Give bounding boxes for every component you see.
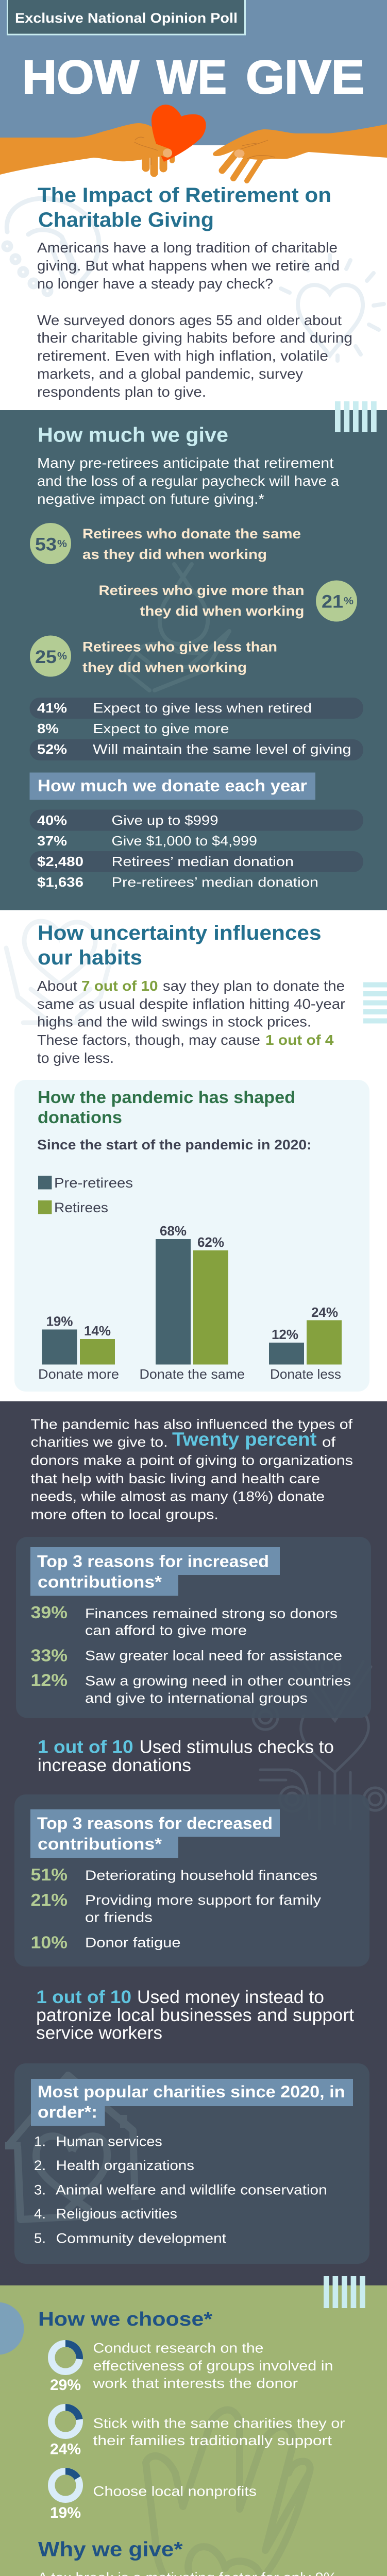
bar chart: 24% bbox=[311, 1304, 338, 1320]
ranked list: 4. bbox=[34, 2206, 46, 2222]
table: annual donations: Give $1,000 to $4,999 bbox=[111, 833, 257, 849]
reason list: 39% bbox=[31, 1603, 68, 1622]
donut: 24% same charities: their families traditionally support bbox=[93, 2433, 332, 2448]
heading: our habits bbox=[38, 946, 142, 969]
table: expectations: Will maintain the same level of giving bbox=[93, 741, 351, 757]
title bbox=[22, 51, 364, 104]
stat: 21%: they did when working bbox=[140, 603, 304, 619]
bar chart: 62% bbox=[197, 1234, 224, 1250]
subheading: how much we donate each year: How much we donate each year bbox=[38, 776, 307, 795]
body text: more often to local groups. bbox=[31, 1506, 218, 1522]
body text: that help with basic living and health care bbox=[31, 1471, 320, 1486]
decorative circle bbox=[0, 2302, 24, 2354]
intro text: their charitable giving habits before and during bbox=[37, 330, 352, 346]
donut: 29% research: effectiveness of groups involved in bbox=[93, 2358, 333, 2374]
header section bbox=[0, 0, 387, 181]
stat: local businesses: service workers bbox=[36, 2023, 162, 2043]
heading: How much we give bbox=[38, 423, 228, 446]
watermark: money bag and hand bbox=[124, 564, 229, 690]
ranked list: Human services bbox=[56, 2134, 162, 2149]
reason list: Donor fatigue bbox=[85, 1935, 180, 1951]
body text bbox=[31, 1417, 353, 1522]
panel: most popular charities bbox=[5, 2063, 369, 2264]
heading: How uncertainty influences bbox=[38, 922, 322, 944]
watermark: hands pattern bbox=[253, 1655, 386, 1829]
heading bbox=[38, 184, 331, 231]
panel: reasons for increased contributions bbox=[16, 1537, 371, 1718]
table: expectations: Expect to give more bbox=[93, 721, 229, 736]
reason list: and give to international groups bbox=[85, 1690, 308, 1706]
stat: local businesses: Used money instead to bbox=[137, 1987, 324, 2007]
chart subtitle: Since the start of the pandemic in 2020: bbox=[37, 1137, 311, 1153]
stat: 25% bbox=[30, 636, 277, 677]
body text: same as usual despite inflation hitting 40-year bbox=[37, 996, 345, 1012]
stat: local businesses: patronize local businesses and support bbox=[36, 2005, 354, 2025]
heading: Charitable Giving bbox=[38, 209, 214, 231]
table: annual donations: Give up to $999 bbox=[111, 812, 218, 828]
stat: local businesses bbox=[36, 1987, 354, 2043]
table: annual donations: 37% bbox=[37, 833, 67, 849]
panel heading bbox=[38, 1088, 295, 1127]
intro text: no longer have a steady pay check? bbox=[37, 276, 273, 292]
stat: stimulus checks bbox=[38, 1737, 334, 1775]
panel heading bbox=[31, 2079, 353, 2126]
stat: 53%: Retirees who donate the same bbox=[82, 526, 301, 541]
watermark: heart with rays bbox=[281, 255, 384, 361]
title: HOW bbox=[22, 51, 139, 104]
reason list: 33% bbox=[31, 1646, 68, 1665]
panel heading: contributions* bbox=[38, 1573, 162, 1591]
table: annual donations: 40% bbox=[37, 812, 67, 828]
stat: 53% bbox=[30, 523, 301, 564]
body text: These factors, though, may cause bbox=[37, 1032, 260, 1048]
stat: 25%: % bbox=[57, 651, 67, 662]
intro text bbox=[37, 240, 352, 400]
reason list: Providing more support for family bbox=[85, 1892, 322, 1908]
body text: charities we give to. bbox=[31, 1434, 168, 1450]
stat: 53%: 53 bbox=[35, 535, 57, 554]
reason list bbox=[31, 1865, 322, 1952]
bar chart: 19% bbox=[46, 1314, 73, 1329]
intro text: We surveyed donors ages 55 and older about bbox=[37, 312, 342, 328]
intro text: giving. But what happens when we retire and bbox=[37, 258, 340, 274]
section: types of charities bbox=[0, 1401, 387, 2285]
body text: 1 out of 4 bbox=[265, 1032, 334, 1048]
panel heading: donations bbox=[38, 1108, 122, 1127]
body text: to give less. bbox=[37, 1050, 114, 1066]
table: annual donations: $1,636 bbox=[37, 874, 83, 890]
ranked list: 2. bbox=[34, 2158, 46, 2173]
reason list: Saw a growing need in other countries bbox=[85, 1673, 351, 1688]
ranked list: 5. bbox=[34, 2231, 46, 2246]
table: expectations: 8% bbox=[37, 721, 59, 736]
ranked list: 1. bbox=[34, 2134, 46, 2149]
donut: 29% research: 29% bbox=[50, 2377, 81, 2394]
table: annual donations: $2,480 bbox=[37, 854, 83, 869]
stat: 25%: Retirees who give less than bbox=[82, 639, 277, 654]
section: how much we give bbox=[0, 401, 387, 910]
panel: reasons for decreased contributions bbox=[14, 1794, 369, 1967]
stat: stimulus checks: Used stimulus checks to bbox=[140, 1737, 334, 1757]
bar chart: Donate the same bbox=[139, 1366, 245, 1382]
table: expectations: Expect to give less when retired bbox=[93, 700, 312, 716]
intro text: markets, and a global pandemic, survey bbox=[37, 366, 303, 382]
intro text bbox=[37, 455, 339, 507]
ranked list: Religious activities bbox=[56, 2206, 177, 2222]
reason list: 12% bbox=[31, 1671, 68, 1690]
table: annual donations: Retirees’ median donation bbox=[111, 854, 294, 869]
stat: 53%: % bbox=[57, 538, 67, 550]
badge: exclusive national opinion poll bbox=[7, 0, 245, 35]
decorative bars bbox=[363, 982, 387, 1023]
bar chart: 12% bbox=[272, 1327, 298, 1342]
reason list: 51% bbox=[31, 1865, 68, 1884]
intro text: Americans have a long tradition of charitable bbox=[37, 240, 338, 256]
badge: exclusive national opinion poll: Exclusive National Opinion Poll bbox=[15, 10, 238, 26]
body text: About bbox=[37, 978, 77, 994]
panel heading: Most popular charities since 2020, in bbox=[38, 2082, 345, 2101]
illustration: hands giving a heart bbox=[0, 105, 387, 181]
table: annual donations: Pre-retirees’ median donation bbox=[111, 874, 318, 890]
donut: 19% local nonprofits: Choose local nonprofits bbox=[93, 2483, 257, 2499]
stat: stimulus checks: 1 out of 10 bbox=[38, 1737, 133, 1757]
body text: donors make a point of giving to organizations bbox=[31, 1453, 353, 1468]
panel heading bbox=[30, 1809, 280, 1858]
intro text: Many pre-retirees anticipate that retirement bbox=[37, 455, 334, 471]
panel heading: How the pandemic has shaped bbox=[38, 1088, 295, 1107]
ranked list: Animal welfare and wildlife conservation bbox=[56, 2182, 327, 2198]
intro text: negative impact on future giving.* bbox=[37, 491, 264, 507]
ranked list bbox=[34, 2134, 327, 2246]
body text: highs and the wild swings in stock prices. bbox=[37, 1014, 311, 1030]
watermark: house with heart bbox=[5, 2075, 139, 2219]
section: how we choose and why we give bbox=[0, 2276, 387, 2576]
decorative bars bbox=[324, 2276, 365, 2308]
body text: 7 out of 10 bbox=[81, 978, 158, 994]
reason list bbox=[31, 1603, 351, 1706]
table: annual donations bbox=[30, 810, 363, 890]
legend bbox=[38, 1175, 133, 1215]
stat: stimulus checks: increase donations bbox=[38, 1755, 191, 1775]
reason list: 10% bbox=[31, 1933, 68, 1952]
legend: Pre-retirees bbox=[54, 1175, 133, 1191]
heading: why we give: Why we give* bbox=[38, 2538, 183, 2561]
donut: 24% same charities bbox=[50, 2408, 345, 2458]
ranked list: 3. bbox=[34, 2182, 46, 2198]
bar chart: Donate more bbox=[38, 1366, 119, 1382]
donut: 29% research bbox=[50, 2340, 333, 2394]
stat: local businesses: 1 out of 10 bbox=[36, 1987, 131, 2007]
heading bbox=[38, 922, 322, 969]
table: expectations: 52% bbox=[37, 741, 67, 757]
panel heading: order*: bbox=[38, 2103, 97, 2122]
stat: 21%: Retirees who give more than bbox=[99, 583, 304, 598]
reason list: Deteriorating household finances bbox=[85, 1868, 317, 1883]
body text: say they plan to donate the bbox=[163, 978, 345, 994]
bar chart bbox=[38, 1223, 342, 1382]
reason list: or friends bbox=[85, 1910, 153, 1925]
decorative bars bbox=[335, 401, 377, 432]
body text bbox=[37, 978, 345, 1066]
bar chart: 14% bbox=[84, 1323, 111, 1338]
body text: of bbox=[322, 1434, 336, 1450]
stat: 25%: they did when working bbox=[82, 659, 247, 675]
watermark: hands with heart bbox=[6, 921, 114, 1023]
intro text: and the loss of a regular paycheck will have a bbox=[37, 473, 339, 489]
intro text: retirement. Even with high inflation, volatile bbox=[37, 348, 328, 364]
intro text: respondents plan to give. bbox=[37, 384, 206, 400]
stat: 21%: % bbox=[344, 596, 354, 607]
heading: how we choose: How we choose* bbox=[38, 2309, 212, 2330]
panel: pandemic chart bbox=[14, 1080, 369, 1392]
panel heading bbox=[30, 1547, 280, 1596]
donut: 24% same charities: 24% bbox=[50, 2441, 81, 2458]
stat: 21% bbox=[99, 580, 357, 621]
reason list: Finances remained strong so donors bbox=[85, 1606, 338, 1621]
donut: 29% research: work that interests the donor bbox=[92, 2376, 298, 2391]
table: expectations bbox=[30, 698, 363, 760]
panel heading: Top 3 reasons for increased bbox=[37, 1552, 269, 1571]
title: WE bbox=[157, 51, 227, 104]
donut: 24% same charities: Stick with the same charities they or bbox=[93, 2416, 345, 2431]
body text: needs, while almost as many (18%) donate bbox=[31, 1489, 325, 1504]
stat: 25%: 25 bbox=[35, 647, 57, 667]
reason list: Saw greater local need for assistance bbox=[85, 1648, 342, 1663]
bar chart: 68% bbox=[160, 1223, 187, 1239]
body text: The pandemic has also influenced the types of bbox=[31, 1417, 353, 1432]
stat: 53%: as they did when working bbox=[82, 547, 267, 562]
legend: Retirees bbox=[54, 1200, 108, 1215]
reason list: can afford to give more bbox=[85, 1623, 247, 1638]
ranked list: Health organizations bbox=[56, 2158, 194, 2173]
section: how uncertainty influences our habits bbox=[6, 921, 387, 1392]
panel heading: Top 3 reasons for decreased bbox=[37, 1814, 273, 1833]
donut: 19% local nonprofits: 19% bbox=[50, 2504, 81, 2521]
body text: Twenty percent bbox=[172, 1429, 316, 1450]
donut: 19% local nonprofits bbox=[50, 2471, 257, 2521]
watermark: hand with heart bbox=[146, 2410, 310, 2576]
subheading: how much we donate each year bbox=[30, 773, 315, 800]
stat: 21%: 21 bbox=[322, 591, 343, 612]
bar chart: Donate less bbox=[270, 1366, 341, 1382]
panel heading: contributions* bbox=[38, 1835, 162, 1853]
table: expectations: 41% bbox=[37, 700, 67, 716]
reason list: 21% bbox=[31, 1890, 68, 1909]
ranked list: Community development bbox=[56, 2231, 227, 2246]
donut: 29% research: Conduct research on the bbox=[93, 2340, 264, 2355]
heading: The Impact of Retirement on bbox=[38, 184, 331, 207]
watermark: hand icon bbox=[4, 198, 99, 295]
section: impact of retirement bbox=[4, 184, 384, 400]
title: GIVE bbox=[246, 51, 364, 104]
